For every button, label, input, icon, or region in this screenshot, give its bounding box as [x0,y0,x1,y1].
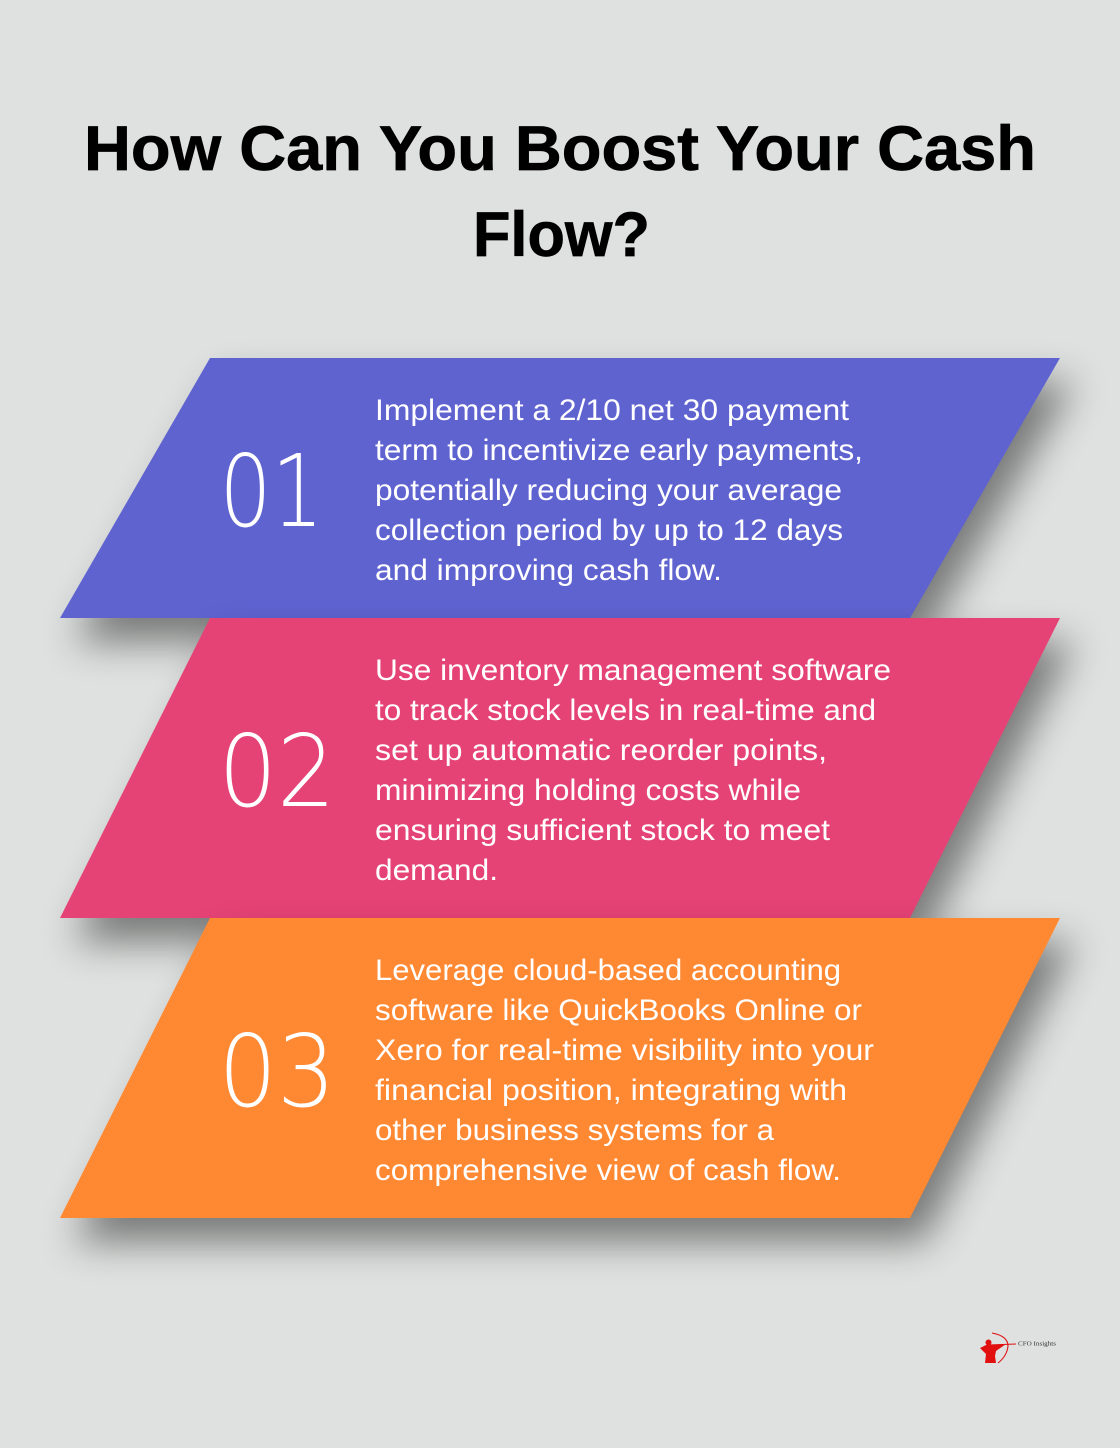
panel: step 03 [60,918,1060,1218]
text block: step 02: demand. [375,854,498,887]
title: Flow? [473,200,650,270]
text block: step 03: software like QuickBooks Online or [375,994,862,1027]
text block: step 02: to track stock levels in real-time and [375,694,876,727]
number: 01: 01 [220,433,324,550]
text block: step 01: and improving cash flow. [375,554,722,587]
band: step 02 [60,618,1060,918]
logo: CFO Insights [980,1333,1057,1363]
band: step 03 [60,918,1060,1218]
text block: step 03: Leverage cloud-based accounting [375,954,841,987]
brand name: CFO Insights [1018,1342,1057,1348]
text block: step 01 [375,394,863,587]
text block: step 03: Xero for real-time visibility into your [375,1034,874,1067]
band: step 01 [60,358,1060,618]
text block: step 02 [375,654,891,887]
text block: step 03: comprehensive view of cash flow. [375,1154,841,1187]
text block: step 02: minimizing holding costs while [375,774,801,807]
text block: step 01: term to incentivize early payments, [375,434,863,467]
number: 03: 03 [218,1013,336,1130]
panel: step 02 [60,618,1060,918]
text block: step 03: other business systems for a [375,1114,774,1147]
text block: step 03 [375,954,874,1187]
icon: red archer [980,1333,1016,1363]
text block: step 02: set up automatic reorder points, [375,734,827,767]
panel: step 01 [60,358,1060,618]
number: 02: 02 [218,713,336,830]
text block: step 01: potentially reducing your average [375,474,842,507]
text block: step 01: collection period by up to 12 days [375,514,843,547]
text block: step 01: Implement a 2/10 net 30 payment [375,394,850,427]
text block: step 02: ensuring sufficient stock to meet [375,814,831,847]
title [84,114,1036,270]
title: How Can You Boost Your Cash [84,114,1036,184]
text block: step 02: Use inventory management software [375,654,891,687]
text block: step 03: financial position, integrating with [375,1074,847,1107]
